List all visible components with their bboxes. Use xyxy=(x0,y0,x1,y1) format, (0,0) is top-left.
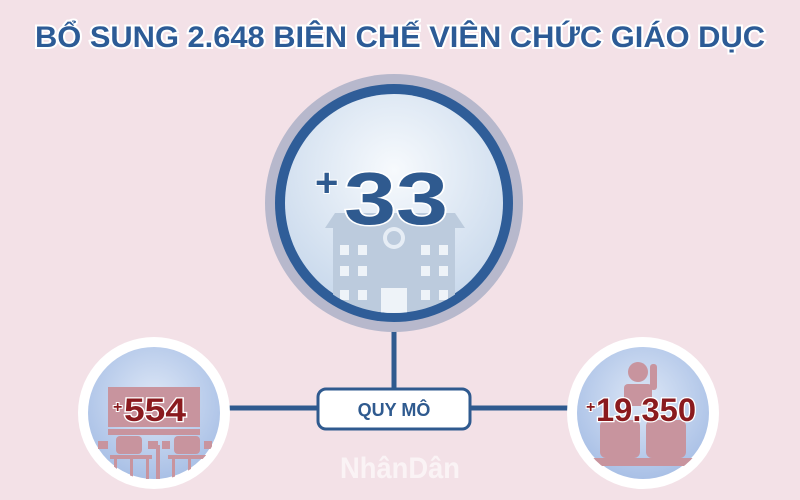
icon: students xyxy=(594,362,692,466)
title: BỔ SUNG 2.648 BIÊN CHẾ VIÊN CHỨC GIÁO DỤC xyxy=(35,20,765,54)
left circle: classrooms xyxy=(78,337,230,489)
icon: classroom xyxy=(98,387,212,479)
right circle: students: + xyxy=(586,399,595,416)
label box: QUY MÔ xyxy=(318,389,470,429)
left circle: classrooms: + xyxy=(113,399,122,416)
watermark: NhânDân xyxy=(340,452,460,485)
icon: school building xyxy=(325,213,465,313)
left circle: classrooms: 554 xyxy=(124,392,186,428)
right circle: students: 19.350 xyxy=(596,392,696,428)
connector lines xyxy=(228,330,570,408)
main circle: schools xyxy=(265,74,523,332)
main circle: schools: 33 xyxy=(344,157,448,240)
right circle: students xyxy=(567,337,719,489)
label box: QUY MÔ: QUY MÔ xyxy=(358,399,430,420)
number +33: + xyxy=(315,161,338,205)
